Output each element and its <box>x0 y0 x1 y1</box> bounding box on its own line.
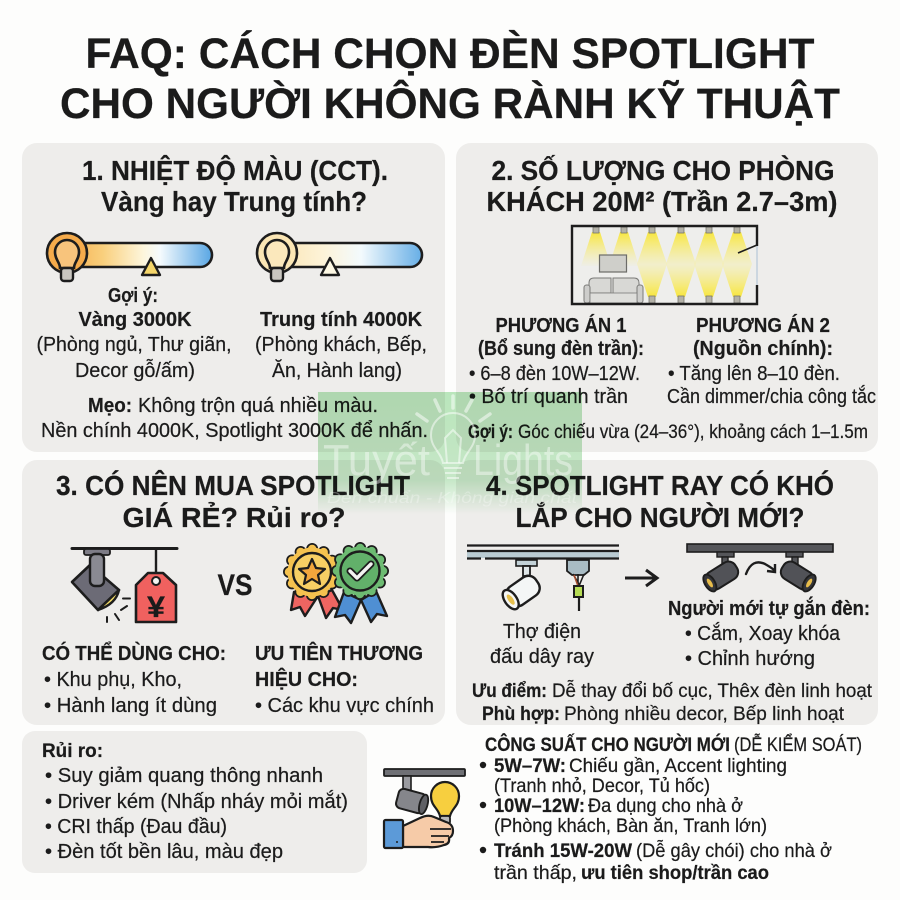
panel: track spotlight installation <box>456 460 878 725</box>
text: warm suggestion: (Phòng ngủ, Thư giãn, <box>36 333 232 356</box>
list item: 5W-7W: Chiếu gần, Accent lighting <box>569 756 787 777</box>
icon: neutral color temperature scale <box>257 233 422 281</box>
icon: quality award badges <box>288 546 387 623</box>
heading: track installation: LẮP CHO NGƯỜI MỚI? <box>516 502 804 533</box>
text: advantages and suitable use: Dễ thay đổi bố cục, Thêx đèn linh hoạt <box>552 679 873 702</box>
text: risk list <box>42 740 348 863</box>
text: neutral suggestion: Ăn, Hành lang) <box>272 359 402 382</box>
text: option 1 <box>469 314 644 408</box>
text: usable for: CÓ THỂ DÙNG CHO: <box>42 641 226 665</box>
heading: quantity: 2. SỐ LƯỢNG CHO PHÒNG <box>492 154 834 186</box>
text: warm suggestion: Vàng 3000K <box>78 308 192 331</box>
heading: power guide: (DỄ KIỂM SOÁT) <box>734 734 862 756</box>
text: beginner steps: Người mới tự gắn đèn: <box>668 596 870 620</box>
text: neutral suggestion <box>255 308 427 382</box>
heading: quantity <box>486 154 838 217</box>
list item: 5W-7W <box>480 756 787 797</box>
arrow: to beginner installation <box>625 570 657 586</box>
heading: track installation: 4. SPOTLIGHT RAY CÓ KHÓ <box>486 470 834 501</box>
text: usable for <box>42 641 226 717</box>
title: CHO NGƯỜI KHÔNG RÀNH KỸ THUẬT <box>60 79 840 128</box>
text: beginner steps: • Chỉnh hướng <box>685 647 815 670</box>
text: tip: Nền chính 4000K, Spotlight 3000K để nhấn. <box>41 419 428 442</box>
icon: cheap spotlight with price tag: ¥ <box>147 591 165 624</box>
text: electrician caption: đấu dây ray <box>490 645 595 668</box>
list item: 10W-12W: 10W–12W: <box>494 796 585 817</box>
watermark: Tuyet Lights logo: Lights <box>473 436 573 485</box>
text: option 2: Cần dimmer/chia công tắc <box>667 385 876 408</box>
text: electrician caption <box>490 620 595 668</box>
list item: 5W-7W: 5W–7W: <box>494 756 566 777</box>
heading: cheap spotlight: 3. CÓ NÊN MUA SPOTLIGHT <box>56 470 410 501</box>
title: FAQ: CÁCH CHỌN ĐÈN SPOTLIGHT <box>86 30 814 78</box>
text: option 1: PHƯƠNG ÁN 1 <box>496 314 626 337</box>
title <box>60 30 840 128</box>
heading: color temperature <box>82 154 388 217</box>
text: risk list: • Suy giảm quang thông nhanh <box>45 764 323 787</box>
panel: risks <box>22 731 367 873</box>
panel: color temperature <box>22 143 445 452</box>
list item: 10W-12W: (Phòng khách, Bàn ăn, Tranh lớn) <box>494 816 767 837</box>
list item: 10W-12W <box>480 796 767 837</box>
watermark: Tuyet Lights logo: Tuyết <box>323 436 430 485</box>
text: tip <box>41 394 428 442</box>
text: advantages and suitable use: Phù hợp: <box>482 703 560 725</box>
text: risk list: • CRI thấp (Đau đầu) <box>45 815 227 838</box>
list item: avoid 15W-20W: ưu tiên shop/trần cao <box>581 863 769 884</box>
list item: 10W-12W: Đa dụng cho nhà ở <box>588 796 743 817</box>
text: beginner steps <box>668 596 870 670</box>
heading: track installation <box>486 470 834 533</box>
text: risk list: Rủi ro: <box>42 740 103 762</box>
panel: quantity for living room <box>456 143 878 452</box>
text: usable for: • Hành lang ít dùng <box>44 694 217 717</box>
text: neutral suggestion: (Phòng khách, Bếp, <box>255 333 427 356</box>
text: option 2: • Tăng lên 8–10 đèn. <box>668 362 840 385</box>
watermark: Tuyet Lights logo <box>318 392 582 514</box>
illustration: room with spotlights <box>572 226 757 304</box>
text: risk list: • Đèn tốt bền lâu, màu đẹp <box>45 840 283 863</box>
text: option 2 <box>667 314 876 408</box>
text: option 2: (Nguồn chính): <box>693 337 833 360</box>
text: option 1: • Bố trí quanh trần <box>469 385 628 408</box>
heading: power guide <box>485 734 862 756</box>
text: warm suggestion: Gợi ý: <box>108 284 158 307</box>
text: warm suggestion: Decor gỗ/ấm) <box>75 359 195 382</box>
icon: electrician wiring track <box>467 546 619 612</box>
heading: color temperature: 1. NHIỆT ĐỘ MÀU (CCT). <box>82 154 388 186</box>
list item: avoid 15W-20W: (Dễ gây chói) cho nhà ở <box>636 840 832 862</box>
text: advantages and suitable use <box>472 679 873 725</box>
heading: color temperature: Vàng hay Trung tính? <box>101 186 367 217</box>
text: brand priority <box>255 641 434 717</box>
heading: power guide: CÔNG SUẤT CHO NGƯỜI MỚI <box>485 734 730 756</box>
text: warm suggestion <box>36 284 232 382</box>
icon: hand holding bulb under track <box>384 769 465 848</box>
text: advantages and suitable use: Phòng nhiều decor, Bếp linh hoạt <box>564 703 845 725</box>
watermark: Tuyet Lights logo: Đèn chuẩn - Không gian chất <box>327 489 578 507</box>
label: vs: VS <box>218 569 252 602</box>
list item: 5W-7W: (Tranh nhỏ, Decor, Tủ hốc) <box>494 776 710 797</box>
list item: avoid 15W-20W: trần thấp, <box>494 863 577 884</box>
text: power guide for beginners <box>480 734 862 884</box>
text: option 1: (Bổ sung đèn trần): <box>478 337 644 360</box>
heading: cheap spotlight <box>56 470 410 533</box>
panel: cheap spotlight <box>22 460 445 725</box>
text: brand priority: ƯU TIÊN THƯƠNG <box>255 641 423 665</box>
text: risk list: • Driver kém (Nhấp nháy mỏi mắt) <box>45 790 348 813</box>
list item: avoid 15W-20W: Tránh 15W-20W <box>494 841 632 862</box>
icon: cheap spotlight with price tag <box>72 548 177 624</box>
text: beginner steps: • Cắm, Xoay khóa <box>685 622 841 645</box>
list item: avoid 15W-20W <box>480 840 832 884</box>
text: option 2: PHƯƠNG ÁN 2 <box>696 314 830 337</box>
text: brand priority: HIỆU CHO: <box>255 667 358 691</box>
text: tip: Mẹo: <box>88 394 132 417</box>
icon: warm color temperature scale <box>47 233 212 281</box>
text: advantages and suitable use: Ưu điểm: <box>472 680 547 702</box>
text: usable for: • Khu phụ, Kho, <box>44 668 182 691</box>
text: neutral suggestion: Trung tính 4000K <box>260 308 422 331</box>
icon: beginner mounting spotlight <box>687 544 833 594</box>
text: option 1: • 6–8 đèn 10W–12W. <box>469 362 640 385</box>
heading: quantity: KHÁCH 20M² (Trần 2.7–3m) <box>486 186 838 217</box>
text: beam angle suggestion: Gợi ý: <box>468 421 513 443</box>
text: tip: Không trộn quá nhiều màu. <box>138 394 378 417</box>
text: brand priority: • Các khu vực chính <box>255 694 434 717</box>
text: electrician caption: Thợ điện <box>503 620 581 643</box>
heading: cheap spotlight: GIÁ RẺ? Rủi ro? <box>122 501 346 533</box>
